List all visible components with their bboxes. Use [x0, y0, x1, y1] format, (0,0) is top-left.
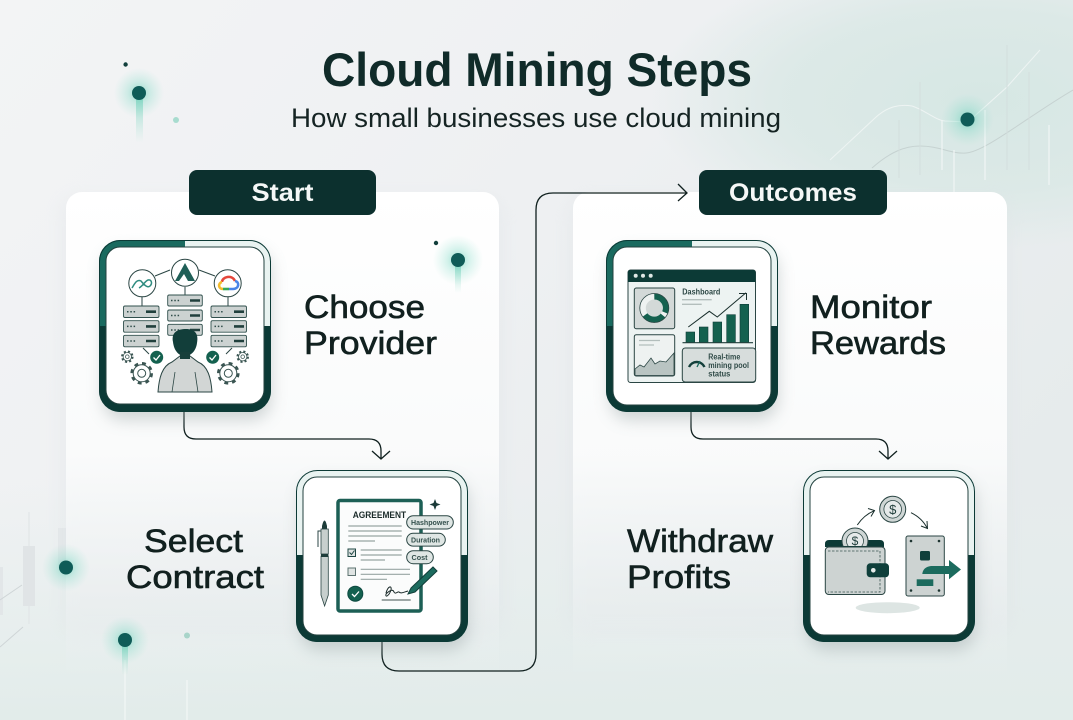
badge: outcomes: Outcomes	[729, 179, 857, 207]
icon: mining pool status: status	[708, 370, 731, 378]
step: choose provider card	[99, 240, 271, 420]
icon: check badges	[143, 348, 232, 364]
subtitle: How small businesses use cloud mining	[291, 103, 781, 133]
arrow: start to outcomes	[382, 184, 687, 671]
icon: contract term pills: Hashpower	[411, 518, 449, 527]
decorative candles: bottom left	[0, 512, 187, 720]
icon: dashboard window	[628, 270, 756, 382]
panel: outcomes background	[567, 192, 1013, 720]
label: select contract	[126, 523, 264, 595]
icon: agreement document	[338, 500, 421, 611]
glow dot: bottom left	[101, 616, 190, 675]
icon: bar chart with trend arrow	[682, 293, 753, 343]
icon: wallet shadow	[856, 602, 920, 613]
icon: provider logos	[129, 259, 241, 306]
label: choose provider: Provider	[304, 325, 437, 361]
icon: contract term pills: Duration	[411, 536, 440, 544]
label: select contract: Contract	[126, 559, 264, 595]
icon: ballpoint pen	[318, 520, 328, 606]
icon: dollar coin: $	[889, 502, 897, 517]
badge: start	[189, 170, 376, 215]
icon: signing pen	[408, 567, 437, 594]
label: monitor rewards	[810, 289, 946, 361]
icon: gears	[122, 352, 248, 383]
icon: mining pool status: mining pool	[708, 361, 749, 370]
icon: contract term pills: Cost	[412, 553, 428, 562]
icon: server racks	[124, 295, 246, 347]
decorative chart lines: top right	[830, 45, 1073, 192]
icon: device with exit arrow	[906, 536, 961, 596]
icon: wallet: $	[852, 534, 859, 548]
label: monitor rewards: Monitor	[810, 289, 932, 325]
icon: dashboard window: Dashboard	[682, 288, 720, 296]
icon: dollar coin	[880, 496, 906, 522]
badge: start: Start	[252, 179, 314, 207]
glow dot: top left	[114, 62, 179, 143]
icon: sparkle	[430, 499, 440, 510]
label: choose provider	[304, 289, 437, 361]
label: choose provider: Choose	[304, 289, 425, 325]
icon: area chart	[634, 335, 675, 376]
arrow: choose provider to select contract	[184, 411, 390, 459]
arrow: wallet to coin	[857, 508, 874, 525]
title: Cloud Mining Steps	[322, 43, 752, 96]
step: withdraw profits card	[803, 470, 975, 650]
arrow: coin to device	[911, 513, 928, 528]
icon: person	[158, 329, 212, 392]
label: select contract: Select	[144, 523, 243, 559]
label: monitor rewards: Rewards	[810, 325, 946, 361]
badge: outcomes	[699, 170, 887, 215]
label: withdraw profits: Profits	[627, 559, 731, 595]
label: withdraw profits	[627, 523, 774, 595]
icon: mining pool status: Real-time	[708, 352, 741, 362]
icon: mining pool status	[682, 348, 756, 382]
label: withdraw profits: Withdraw	[627, 523, 774, 559]
glow dot: panel top	[433, 235, 483, 293]
step: select contract card	[296, 470, 468, 650]
icon: agreement document: AGREEMENT	[353, 510, 407, 520]
icon: contract term pills	[407, 516, 453, 564]
panel: start background	[60, 192, 505, 720]
icon: wallet	[825, 528, 889, 594]
step: monitor rewards card	[606, 240, 778, 420]
glow dot: left	[42, 544, 90, 592]
arrow: monitor rewards to withdraw profits	[691, 411, 897, 459]
icon: donut chart	[634, 288, 675, 329]
glow dot: top right	[942, 94, 994, 146]
